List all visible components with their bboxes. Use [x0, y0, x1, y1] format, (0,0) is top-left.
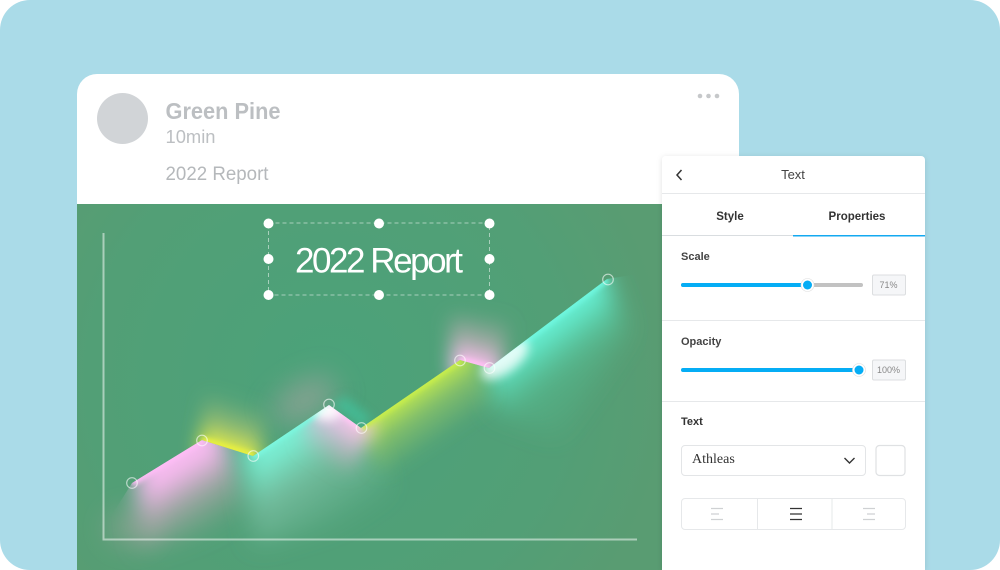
edge colour: bright line under the curve [132, 279, 607, 483]
glow: teal above valley [332, 396, 372, 428]
icon: align left [711, 508, 723, 520]
tab: properties: Properties [829, 211, 885, 223]
post caption: 2022 Report [166, 164, 269, 185]
font dropdown [682, 446, 866, 476]
glow: peak highlight [313, 402, 341, 420]
glow: soft haze under first point [106, 510, 154, 546]
scale control [681, 251, 906, 295]
author name: Green Pine [166, 98, 280, 124]
chart image area [77, 204, 662, 570]
report card [77, 74, 739, 570]
glow: segment 3 teal [230, 406, 380, 542]
scale control: Scale [681, 251, 710, 263]
opacity control: 100% [877, 365, 900, 375]
glow: segment 6 pink [450, 315, 510, 388]
colour swatch [876, 446, 905, 476]
glow: segment 7 highlight [476, 338, 534, 386]
alignment buttons [682, 498, 906, 530]
icon: align right [863, 508, 875, 520]
glow: segment 5 lime [358, 360, 491, 470]
edge colour: bright line above the curve [202, 360, 489, 456]
opacity control: Opacity [681, 336, 722, 348]
chart axes [104, 233, 637, 540]
back arrow [677, 170, 682, 180]
icon: align centre [790, 508, 802, 520]
glow: segment 1 pink [120, 440, 249, 555]
text section label: Text [681, 416, 703, 428]
scale control: 71% [879, 280, 898, 290]
selection frame [264, 218, 494, 300]
glows below the line [132, 262, 628, 550]
glows above the line [198, 315, 510, 475]
post time: 10min [166, 126, 216, 147]
panel title: Text [781, 167, 805, 182]
chart title: 2022 Report [295, 242, 463, 280]
glow: haze above peak [266, 367, 344, 433]
tab: style: Style [716, 211, 744, 223]
glow: segment 4 pink [300, 390, 374, 475]
data point markers [127, 274, 613, 488]
glow: segment 2 yellow [198, 390, 268, 475]
glow: segment 7 teal [475, 277, 630, 420]
avatar [97, 93, 148, 144]
more menu icon [698, 94, 719, 98]
font dropdown: Athleas [692, 452, 735, 467]
opacity control [681, 336, 906, 380]
properties panel [662, 156, 925, 570]
